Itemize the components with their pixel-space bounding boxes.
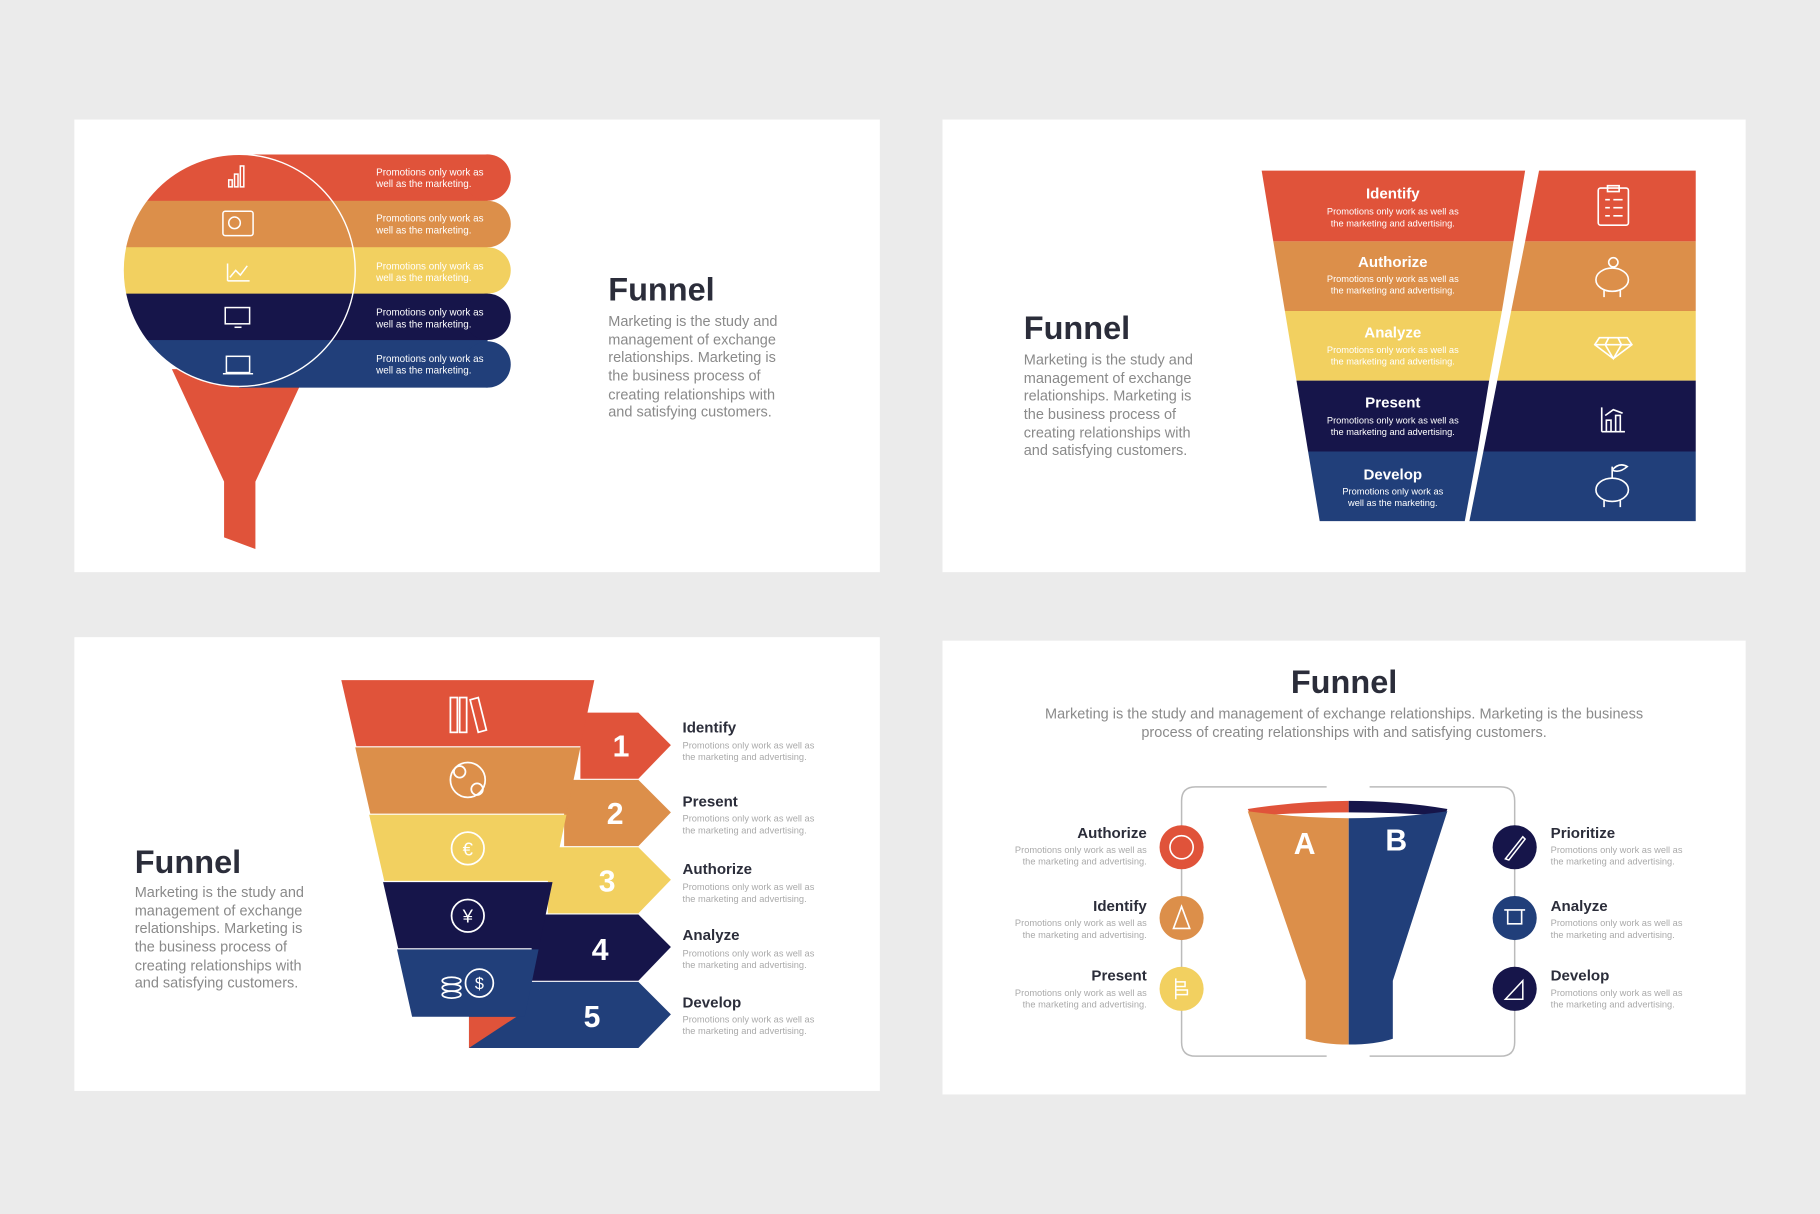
paragraph: relationships. Marketing is: [608, 350, 776, 366]
band labels: Promotions only work as well as: [1327, 207, 1459, 217]
right labels: Develop: [1551, 968, 1609, 985]
paragraph: creating relationships with: [608, 387, 775, 403]
band labels: the marketing and advertising.: [1331, 356, 1455, 366]
paragraph: Marketing is the study and: [1024, 352, 1193, 368]
bar icons: $: [475, 975, 484, 993]
left labels: Authorize: [1077, 825, 1147, 842]
band texts: [375, 167, 484, 377]
paragraph: and satisfying customers.: [608, 405, 772, 421]
right labels: [1551, 825, 1683, 1009]
paragraph: and satisfying customers.: [135, 976, 298, 992]
arrow labels: the marketing and advertising.: [683, 825, 807, 835]
left labels: Promotions only work as well as: [1015, 845, 1147, 855]
left labels: Present: [1091, 968, 1147, 985]
arrow labels: the marketing and advertising.: [683, 894, 807, 904]
title: Funnel: [135, 844, 241, 880]
bar icons: [442, 698, 493, 998]
paragraph: the business process of: [608, 369, 762, 385]
band labels: the marketing and advertising.: [1331, 427, 1455, 437]
panel: stacked funnel with numbered arrows: [74, 637, 880, 1091]
left labels: Promotions only work as well as: [1015, 918, 1147, 928]
paragraph: Marketing is the study and: [135, 885, 304, 901]
title: Funnel: [1024, 310, 1130, 346]
right labels: Prioritize: [1551, 825, 1615, 842]
funnel cone: [172, 369, 308, 549]
icons: [223, 166, 253, 374]
band labels: Develop: [1363, 466, 1422, 483]
arrow labels: Analyze: [683, 927, 740, 944]
bar icons: €: [463, 838, 474, 859]
paragraph: creating relationships with: [135, 958, 302, 974]
panel: circle funnel: [74, 120, 880, 572]
left labels: [1015, 825, 1147, 1009]
right labels: Promotions only work as well as: [1551, 918, 1683, 928]
numbers: 3: [599, 865, 615, 898]
arrow labels: Develop: [683, 994, 741, 1011]
right labels: the marketing and advertising.: [1551, 857, 1675, 867]
right labels: Promotions only work as well as: [1551, 845, 1683, 855]
bar icons: ¥: [462, 906, 474, 927]
paragraph: the business process of: [135, 940, 288, 956]
arrow labels: the marketing and advertising.: [683, 1026, 807, 1036]
paragraph: and satisfying customers.: [1024, 443, 1187, 459]
band texts: Promotions only work as: [376, 308, 484, 319]
paragraph: [1024, 352, 1193, 459]
band texts: well as the marketing.: [375, 366, 471, 377]
funnel bands: [116, 154, 488, 388]
band labels: the marketing and advertising.: [1331, 218, 1455, 228]
paragraph: management of exchange: [608, 333, 776, 349]
title: Funnel: [1291, 664, 1397, 700]
band labels: Promotions only work as well as: [1327, 274, 1459, 284]
panel: split trapezoid funnel: [942, 120, 1746, 572]
band labels: Promotions only work as: [1342, 486, 1444, 496]
arrow labels: the marketing and advertising.: [683, 960, 807, 970]
arrow labels: Promotions only work as well as: [683, 741, 815, 751]
frame lines: [1182, 787, 1515, 1056]
band texts: Promotions only work as: [376, 167, 484, 178]
subtitle: [1045, 706, 1643, 741]
arrow labels: Present: [683, 794, 738, 811]
band labels: Promotions only work as well as: [1327, 416, 1459, 426]
band texts: well as the marketing.: [375, 273, 471, 284]
band labels: well as the marketing.: [1347, 498, 1438, 508]
left circles: [1160, 825, 1204, 1011]
arrow labels: the marketing and advertising.: [683, 752, 807, 762]
left trapezoid bands: [1262, 171, 1525, 521]
left labels: the marketing and advertising.: [1023, 999, 1147, 1009]
right labels: Promotions only work as well as: [1551, 988, 1683, 998]
right labels: Analyze: [1551, 898, 1608, 915]
paragraph: creating relationships with: [1024, 426, 1191, 442]
paragraph: [135, 885, 304, 992]
band texts: well as the marketing.: [375, 319, 471, 330]
cup A/B: B: [1385, 825, 1407, 858]
arrow labels: Identify: [683, 719, 737, 736]
left labels: the marketing and advertising.: [1023, 930, 1147, 940]
band labels: [1327, 185, 1459, 508]
band texts: Promotions only work as: [376, 261, 484, 272]
left labels: Identify: [1093, 898, 1147, 915]
band labels: Authorize: [1358, 254, 1428, 271]
paragraph: management of exchange: [1024, 371, 1191, 387]
panel: A/B funnel: [942, 641, 1746, 1094]
band labels: Identify: [1366, 185, 1420, 202]
funnel bars: [341, 680, 594, 1017]
band texts: Promotions only work as: [376, 214, 484, 225]
arrow labels: Promotions only work as well as: [683, 814, 815, 824]
arrow labels: Authorize: [683, 861, 752, 878]
right circles: [1493, 825, 1537, 1011]
numbers: 5: [584, 1001, 600, 1034]
band labels: Promotions only work as well as: [1327, 345, 1459, 355]
band labels: the marketing and advertising.: [1331, 286, 1455, 296]
paragraph: [608, 314, 778, 421]
paragraph: the business process of: [1024, 407, 1177, 423]
left labels: the marketing and advertising.: [1023, 857, 1147, 867]
band labels: Present: [1365, 394, 1420, 411]
left labels: Promotions only work as well as: [1015, 988, 1147, 998]
right labels: the marketing and advertising.: [1551, 930, 1675, 940]
numbered arrows: [469, 713, 671, 1048]
right icons: [1595, 186, 1632, 507]
subtitle: Marketing is the study and management of exchange relationships. Marketing is the business: [1045, 706, 1643, 722]
band texts: Promotions only work as: [376, 354, 484, 365]
arrow labels: Promotions only work as well as: [683, 948, 815, 958]
arrow labels: Promotions only work as well as: [683, 882, 815, 892]
paragraph: relationships. Marketing is: [135, 921, 302, 937]
numbers: 2: [607, 798, 624, 831]
numbers: 1: [613, 731, 629, 764]
numbers: 4: [592, 934, 609, 967]
cup A/B: A: [1294, 828, 1315, 861]
paragraph: management of exchange: [135, 904, 302, 920]
paragraph: relationships. Marketing is: [1024, 388, 1191, 404]
numbers: [584, 731, 629, 1034]
paragraph: Marketing is the study and: [608, 314, 778, 330]
title: Funnel: [608, 272, 715, 308]
right labels: the marketing and advertising.: [1551, 999, 1675, 1009]
cup A/B: [1248, 801, 1447, 1045]
band texts: well as the marketing.: [375, 225, 471, 236]
band labels: Analyze: [1364, 325, 1421, 342]
arrow labels: Promotions only work as well as: [683, 1014, 815, 1024]
subtitle: process of creating relationships with and satisfying customers.: [1141, 725, 1547, 741]
arrow labels: [683, 719, 815, 1036]
band texts: well as the marketing.: [375, 179, 471, 190]
right parallelogram bands: [1469, 171, 1696, 521]
